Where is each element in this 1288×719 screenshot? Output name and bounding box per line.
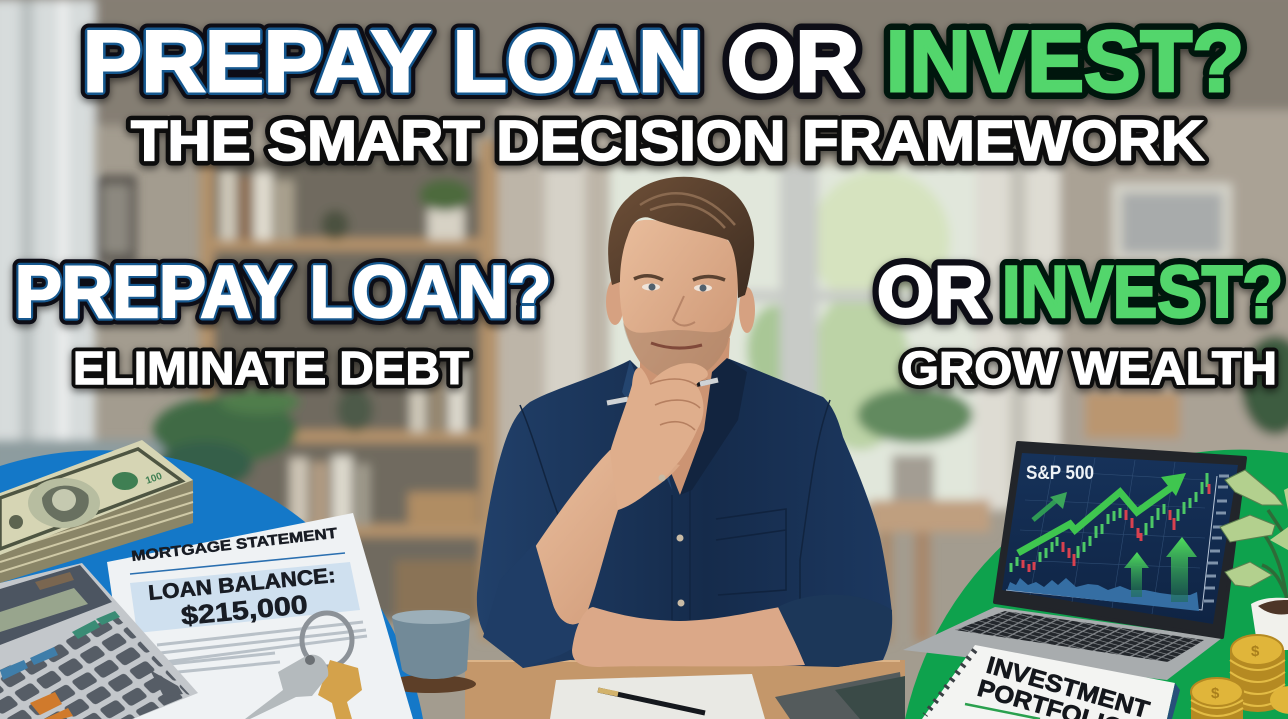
left collar <box>622 360 672 490</box>
left subheading: ELIMINATE DEBT <box>73 342 469 394</box>
chart grid <box>1015 456 1205 614</box>
right rolled cuff <box>778 595 892 667</box>
title: prepay loan: PREPAY LOAN <box>83 14 702 110</box>
shirt <box>477 358 892 668</box>
plant pot <box>1251 598 1288 650</box>
left window and curtain <box>0 0 95 470</box>
axis labels <box>1006 476 1217 610</box>
mortgage statement paper <box>107 513 413 719</box>
left heading: prepay loan: PREPAY LOAN? <box>15 252 551 333</box>
subtitle: THE SMART DECISION FRAMEWORK <box>131 109 1204 173</box>
right subheading: GROW WEALTH <box>901 342 1277 394</box>
red candles <box>1023 484 1209 572</box>
mortgage items <box>0 440 413 719</box>
right heading: or invest: OR <box>877 252 987 333</box>
title: invest: INVEST? <box>886 14 1244 110</box>
investment portfolio notebook <box>922 645 1180 719</box>
green candles <box>1011 473 1207 572</box>
statement heading: MORTGAGE STATEMENT <box>131 526 338 565</box>
laptop lid <box>995 443 1245 637</box>
dark laptop on desk <box>775 672 905 719</box>
face <box>620 220 738 380</box>
subtitle: THE SMART DECISION FRAMEWORK <box>131 109 1204 173</box>
investment items <box>903 443 1288 719</box>
title: prepay loan: PREPAY LOAN <box>83 14 702 110</box>
notebook title line one: INVESTMENT <box>983 652 1153 719</box>
plant and pot by window <box>857 387 973 505</box>
mouth <box>651 343 702 348</box>
person <box>477 177 892 668</box>
stubble <box>623 318 733 380</box>
gold coin stacks: $ <box>1251 643 1260 660</box>
picture frame on wall <box>96 176 136 262</box>
right collar <box>680 358 747 495</box>
laptop keyboard <box>955 611 1204 662</box>
lower left wall <box>0 440 200 540</box>
title: or: OR <box>727 14 859 110</box>
coffee mug <box>384 610 476 693</box>
finger creases <box>650 379 700 430</box>
title: prepay loan: PREPAY LOAN <box>83 14 702 110</box>
right heading: or invest <box>877 252 1283 333</box>
eyes <box>642 284 712 292</box>
eyebrows <box>634 276 725 280</box>
left heading: prepay loan: PREPAY LOAN? <box>15 252 551 333</box>
small rising arrow <box>1033 492 1067 520</box>
green plant left <box>153 390 300 489</box>
gold coin stacks <box>1191 635 1288 719</box>
sleeve seam shading <box>520 400 830 610</box>
right wall with picture <box>1060 110 1288 530</box>
money plant <box>1220 470 1288 650</box>
paper and pen on desk <box>550 674 765 719</box>
up arrow one <box>1124 552 1149 597</box>
nose <box>673 296 695 326</box>
house keys <box>245 613 362 719</box>
green circle panel <box>905 450 1288 719</box>
centre curtain <box>498 110 623 610</box>
cash stack <box>0 440 193 583</box>
laptop base <box>903 607 1222 680</box>
lamp and dark plant <box>1085 335 1288 438</box>
right heading: or invest: OR <box>877 252 987 333</box>
main rising arrow <box>1018 473 1186 553</box>
neck and chest <box>640 338 730 495</box>
raised forearm <box>535 450 680 624</box>
right curtain <box>975 150 1060 510</box>
left heading: prepay loan: PREPAY LOAN? <box>15 252 551 333</box>
hand at chin <box>610 363 708 510</box>
loan balance label: LOAN BALANCE: <box>147 564 337 605</box>
right subheading: GROW WEALTH <box>901 342 1277 394</box>
desk <box>465 660 905 719</box>
title: or: OR <box>727 14 859 110</box>
loan balance value: $215,000 <box>180 589 309 631</box>
loan balance box <box>130 562 360 633</box>
shirt placket and buttons <box>658 474 690 620</box>
gold coin stacks: $ <box>1211 685 1220 702</box>
cash stack: 100 <box>144 471 164 487</box>
bright window <box>610 165 1050 505</box>
calculator <box>0 563 198 719</box>
main title <box>83 14 1244 110</box>
hair <box>608 177 754 298</box>
forearm on desk <box>572 607 805 667</box>
ears <box>606 279 755 333</box>
blue circle panel <box>0 450 423 719</box>
left subheading: ELIMINATE DEBT <box>73 342 469 394</box>
pen in hand <box>607 380 718 403</box>
chart screen <box>1002 453 1238 624</box>
left rolled cuff <box>483 543 590 668</box>
side table <box>870 500 990 642</box>
volume bars <box>1007 578 1199 611</box>
bookshelf <box>200 140 498 640</box>
up arrow two <box>1166 537 1197 602</box>
title: invest: INVEST? <box>886 14 1244 110</box>
S&amp;P 500 label: S&P 500 <box>1026 463 1094 484</box>
shirt pocket <box>716 509 786 595</box>
